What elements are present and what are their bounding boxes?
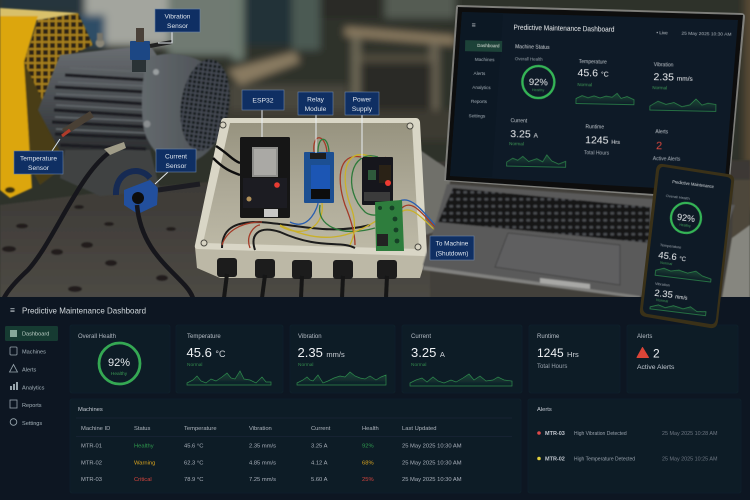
panel: web dashboard	[0, 297, 750, 500]
photo: vibration sensor on motor	[130, 28, 172, 72]
laptop header: • Live	[656, 30, 668, 35]
row: MTR-02: 4.85 mm/s	[249, 460, 276, 466]
card: overall health	[70, 325, 170, 393]
row: MTR-01: 45.6 °C	[184, 444, 203, 450]
callout: to machine shutdown	[430, 236, 474, 260]
table header: Vibration	[249, 426, 272, 432]
dashboard title: ≡	[10, 305, 15, 315]
callout: temperature sensor	[14, 139, 63, 174]
phone header: Predictive Maintenance	[672, 179, 715, 189]
sparkline	[410, 374, 512, 386]
phone temperature: Temperature	[660, 243, 682, 250]
callout: ESP32: ESP32	[252, 98, 274, 104]
row: MTR-02	[81, 460, 462, 466]
photo: junction box with components	[195, 118, 438, 298]
laptop vibration card: Vibration	[654, 62, 674, 69]
card: current: Normal	[411, 362, 426, 368]
alert: MTR-02: High Temperature Detected	[574, 456, 635, 462]
photo: smartphone with mobile dashboard	[640, 164, 734, 328]
card: alerts: Alerts	[637, 334, 652, 340]
row: MTR-02: MTR-02	[81, 460, 102, 466]
laptop runtime card: 1245 Hrs	[585, 134, 620, 147]
row: MTR-02: 4.12 A	[311, 460, 328, 466]
laptop sidebar	[464, 40, 502, 119]
photo: electric motor	[38, 33, 235, 196]
callout: vibration sensor	[155, 9, 200, 43]
laptop temperature card: Temperature	[579, 59, 607, 66]
photo: current sensor clamp and cable	[116, 171, 200, 298]
row: MTR-02: 25 May 2025 10:30 AM	[402, 460, 462, 466]
panel: machines table	[70, 399, 521, 493]
row: MTR-02: 68%	[362, 460, 374, 466]
alert: MTR-03: High Vibration Detected	[574, 431, 627, 437]
phone vibration: Normal	[656, 298, 669, 304]
ESP32 board	[240, 137, 290, 218]
laptop alerts card: Alerts	[655, 129, 669, 135]
panel: alerts list	[528, 399, 741, 493]
laptop vibration card: 2.35 mm/s	[653, 71, 694, 84]
table header: Health	[362, 426, 379, 432]
card: temperature: Normal	[187, 362, 202, 368]
laptop sidebar: Reports	[471, 99, 488, 104]
phone overall health: Healthy	[679, 223, 691, 228]
laptop machine status	[514, 44, 555, 98]
card: current: 3.25 A	[411, 345, 445, 360]
sidebar navigation: Reports	[22, 403, 42, 409]
callout: power supply: Supply	[352, 106, 373, 113]
laptop sidebar: Analytics	[472, 85, 491, 90]
sparkline	[297, 372, 386, 385]
table header: Temperature	[184, 426, 217, 432]
laptop header: ≡	[471, 22, 476, 29]
row: MTR-03: 25%	[362, 477, 374, 483]
laptop alerts card: Active Alerts	[653, 156, 681, 163]
sidebar navigation	[5, 326, 58, 427]
card: current: Current	[411, 334, 431, 340]
laptop header: Predictive Maintenance Dashboard	[513, 22, 615, 34]
card: vibration: 2.35 mm/s	[298, 345, 345, 360]
phone vibration	[650, 282, 709, 316]
laptop sidebar: Machines	[475, 57, 495, 62]
laptop temperature card	[576, 59, 635, 105]
callout: vibration sensor: Sensor	[167, 23, 189, 30]
sidebar navigation: Alerts	[22, 368, 37, 374]
phone overall health	[662, 194, 703, 235]
laptop vibration card	[650, 62, 717, 111]
row: MTR-02: Warning	[134, 460, 155, 466]
panel: machines table: Machines	[78, 407, 103, 413]
laptop vibration card: Normal	[652, 85, 667, 90]
relay module	[304, 152, 334, 203]
row: MTR-01	[81, 444, 462, 450]
photo: laptop screen with dashboard	[444, 5, 745, 201]
table header: Status	[134, 426, 151, 432]
card: vibration: Vibration	[298, 334, 322, 340]
row: MTR-02: 62.3 °C	[184, 460, 203, 466]
laptop runtime card: Runtime	[585, 124, 604, 130]
card: overall health: 92%	[108, 357, 130, 369]
card: runtime: Total Hours	[537, 364, 567, 370]
enclosure shell	[195, 118, 427, 278]
card: runtime	[529, 325, 620, 393]
callout: relay module: Module	[305, 106, 327, 113]
row: MTR-01: MTR-01	[81, 444, 102, 450]
callout: to machine shutdown: To Machine	[436, 240, 469, 248]
alert: MTR-02: 25 May 2025 10:25 AM	[662, 456, 718, 462]
row: MTR-03	[81, 477, 462, 483]
dashboard title: Predictive Maintenance Dashboard	[22, 306, 146, 316]
card: current	[402, 325, 522, 393]
sidebar navigation: Machines	[22, 350, 46, 356]
phone temperature: Normal	[660, 261, 673, 266]
callout: vibration sensor: Vibration	[165, 14, 191, 20]
card: runtime: Runtime	[537, 334, 560, 340]
laptop current card	[507, 118, 567, 167]
row: MTR-03: 25 May 2025 10:30 AM	[402, 477, 462, 483]
phone vibration: 2.35 mm/s	[654, 288, 689, 303]
photo: metal work table	[0, 150, 750, 298]
laptop header	[471, 22, 732, 37]
card: temperature	[176, 325, 283, 393]
callout: temperature sensor: Temperature	[20, 156, 57, 162]
card: alerts	[627, 325, 738, 393]
wiring	[213, 138, 438, 250]
card: temperature: 45.6 °C	[186, 345, 226, 360]
laptop alerts card: 2	[656, 140, 662, 152]
laptop machine status: Healthy	[532, 88, 545, 92]
laptop machine status: 92%	[529, 77, 549, 88]
phone screen content	[650, 178, 723, 316]
laptop header: 25 May 2025 10:30 AM	[681, 31, 732, 37]
row: MTR-03: 78.9 °C	[184, 477, 203, 483]
card: runtime: 1245 Hrs	[537, 346, 579, 360]
table header: Last Updated	[402, 426, 436, 432]
phone overall health: 92%	[676, 212, 696, 224]
row: MTR-01: 25 May 2025 10:30 AM	[402, 444, 462, 450]
table header: Machine ID	[81, 426, 110, 432]
card: overall health: Overall Health	[78, 334, 116, 340]
card: overall health: Healthy	[111, 371, 128, 377]
card: temperature: Temperature	[187, 334, 221, 340]
row: MTR-03: 5.60 A	[311, 477, 328, 483]
sparkline	[187, 371, 271, 385]
phone temperature	[655, 243, 715, 282]
laptop sidebar: Dashboard	[477, 43, 500, 48]
phone vibration: Vibration	[655, 282, 670, 288]
photo: yellow safety guard	[0, 8, 93, 198]
row: MTR-01: 92%	[362, 444, 374, 450]
callout: current sensor	[155, 149, 196, 184]
power supply board	[362, 157, 393, 205]
callout: power supply: Power	[353, 96, 372, 104]
card: alerts: Active Alerts	[637, 364, 675, 371]
laptop temperature card: Normal	[577, 82, 592, 87]
laptop current card: 3.25 A	[510, 128, 539, 141]
row: MTR-03: MTR-03	[81, 477, 102, 483]
row: MTR-01: Healthy	[134, 444, 154, 450]
sidebar navigation: Settings	[22, 421, 42, 427]
card: alerts: 2	[653, 346, 660, 360]
callout: current sensor: Current	[165, 154, 187, 160]
laptop runtime card: Total Hours	[584, 150, 610, 157]
row: MTR-03: Critical	[134, 477, 152, 483]
panel: alerts list: Alerts	[537, 407, 552, 413]
laptop sidebar: Settings	[469, 113, 486, 118]
laptop alerts card	[653, 129, 681, 163]
table header	[81, 426, 436, 432]
laptop machine status: Machine Status	[515, 44, 550, 51]
cable glands	[217, 258, 397, 298]
photo: temperature probe and cable	[4, 114, 126, 298]
alert: MTR-03	[537, 431, 718, 437]
laptop runtime card	[584, 124, 621, 157]
alert: MTR-02: MTR-02	[545, 456, 565, 462]
callout: relay module: Relay	[307, 96, 325, 104]
laptop current card: Normal	[509, 141, 524, 146]
callout: ESP32	[242, 90, 284, 137]
alert: MTR-03: 25 May 2025 10:28 AM	[662, 431, 718, 437]
row: MTR-01: 2.35 mm/s	[249, 444, 276, 450]
photo: blurred workshop background	[0, 0, 750, 310]
callout: temperature sensor: Sensor	[28, 165, 50, 172]
phone temperature: 45.6 °C	[658, 250, 687, 264]
laptop dashboard content	[463, 21, 732, 171]
sidebar navigation: Analytics	[22, 386, 45, 392]
callout: to machine shutdown: (Shutdown)	[436, 250, 468, 258]
laptop current card: Current	[510, 118, 528, 124]
alert: MTR-03: MTR-03	[545, 431, 565, 437]
callout: relay module	[298, 92, 333, 153]
laptop temperature card: 45.6 °C	[577, 67, 609, 80]
table header: Current	[311, 426, 331, 432]
icon: warning triangle	[637, 348, 648, 358]
laptop machine status: Overall Health	[515, 56, 543, 62]
alert: MTR-02	[537, 456, 718, 462]
row: MTR-01: 3.25 A	[311, 444, 328, 450]
sidebar navigation: Dashboard	[22, 332, 49, 338]
card: vibration: Normal	[298, 362, 313, 368]
laptop sidebar: Alerts	[473, 71, 486, 76]
card: vibration	[290, 325, 395, 393]
terminal block	[375, 200, 404, 251]
row: MTR-03: 7.25 mm/s	[249, 477, 276, 483]
callout: current sensor: Sensor	[166, 163, 187, 170]
photo: laptop base with keyboard	[423, 184, 735, 299]
callout: power supply	[345, 92, 379, 158]
phone overall health: Overall Health	[666, 194, 690, 201]
